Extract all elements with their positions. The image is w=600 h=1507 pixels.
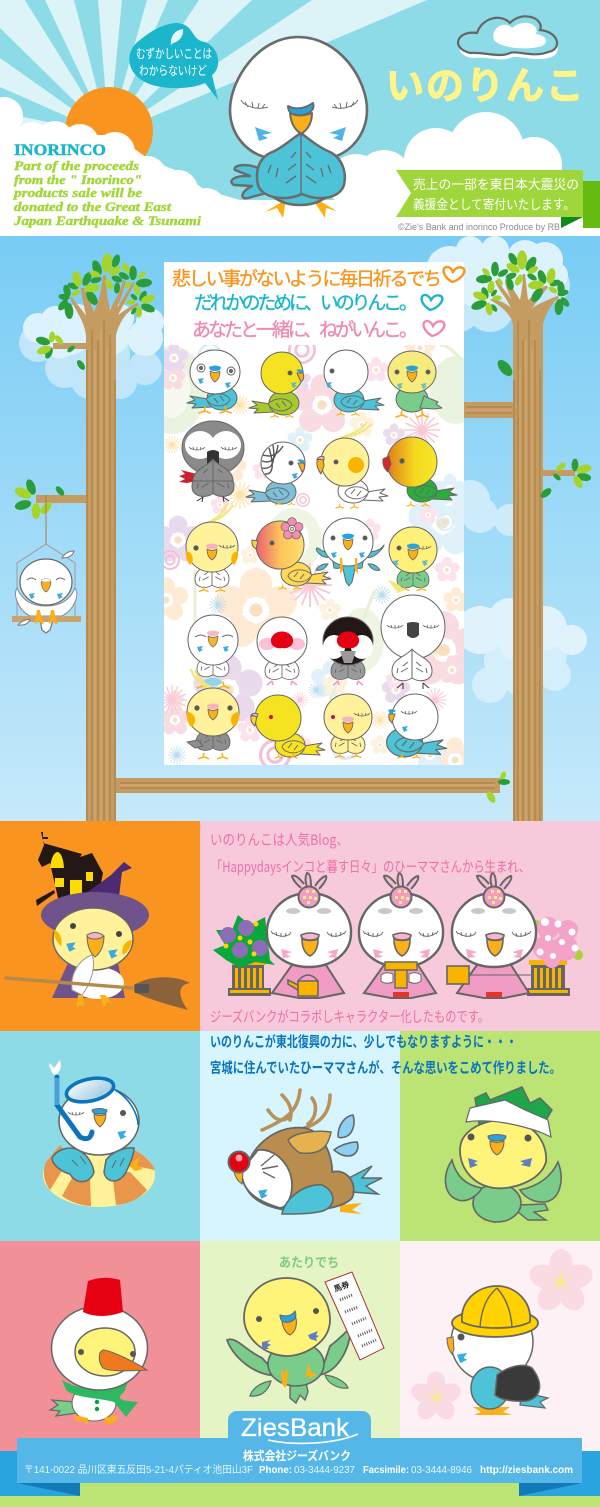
white strip below header xyxy=(0,228,600,236)
right tree xyxy=(464,250,592,821)
cloud logo top right xyxy=(458,16,558,59)
head xyxy=(59,1087,139,1155)
backpack xyxy=(495,1365,540,1401)
scarf xyxy=(62,1380,138,1417)
carrot xyxy=(99,1350,147,1371)
tail xyxy=(517,1204,548,1220)
yellow cap xyxy=(452,1286,538,1337)
bubble text: むずかしいことは xyxy=(136,43,212,62)
ear xyxy=(288,1131,331,1153)
bird: pale yellow budgie xyxy=(388,351,442,417)
intro text: ジーズバンクがコラボしキャラクター化したものです。 xyxy=(210,1006,489,1027)
bird: peach side bird with flower xyxy=(252,518,331,589)
bird grid xyxy=(179,350,457,759)
bandana xyxy=(466,1100,551,1137)
bird: big white cockatiel xyxy=(381,580,445,689)
paper: 馬券 xyxy=(332,1279,351,1295)
footer background xyxy=(0,1451,600,1507)
cheeks xyxy=(255,127,346,141)
bird: white flying bird xyxy=(316,518,384,586)
paper xyxy=(325,1272,384,1360)
logo: ZiesBank xyxy=(241,1414,350,1442)
leaves xyxy=(470,251,592,500)
tail xyxy=(520,1392,548,1408)
face xyxy=(70,923,76,929)
message lines: だれかのために、いのりんこ。 xyxy=(194,288,418,315)
haunted house xyxy=(36,832,103,906)
address line: 03-3444-9237 xyxy=(294,1465,355,1476)
bird: grey praying bird xyxy=(179,421,244,502)
address line: http://ziesbank.com xyxy=(480,1465,573,1476)
intro text: いのりんこは人気Blog、 xyxy=(210,829,349,850)
bird: white side budgie xyxy=(324,350,384,415)
main praying bird xyxy=(230,37,367,218)
English description: Part of the proceeds xyxy=(14,159,139,173)
bird: yellow side bird xyxy=(251,695,325,758)
snow head xyxy=(52,1306,148,1390)
feet xyxy=(74,1415,118,1425)
poster panel xyxy=(164,262,466,765)
left plant and stand xyxy=(213,915,275,996)
tail xyxy=(50,1400,77,1416)
bird: java sparrow black xyxy=(323,617,373,685)
bird: cockatiel yellow xyxy=(317,422,388,508)
head xyxy=(451,1302,533,1382)
plank xyxy=(12,616,81,622)
string and cage xyxy=(45,495,47,544)
bird: yellow green wings xyxy=(389,527,437,590)
bird: white budgie with round eyes xyxy=(187,350,240,413)
body xyxy=(264,155,336,205)
tail xyxy=(231,165,270,198)
leaves xyxy=(14,253,156,512)
sakura xyxy=(409,1249,596,1423)
eyes and beak xyxy=(468,1134,474,1140)
heading: INORINCO: INORINCO xyxy=(14,142,106,159)
falling feathers xyxy=(18,551,74,625)
swim ring xyxy=(43,1143,155,1207)
ribbon folds xyxy=(17,1483,582,1496)
English description: from the " Inorinco" xyxy=(14,173,142,187)
eyes xyxy=(241,100,358,108)
address line: 〒141-0022 品川区東五反田5-21-4パティオ池田山3F xyxy=(24,1463,253,1476)
feet xyxy=(474,1208,512,1224)
head xyxy=(460,1120,546,1188)
beak xyxy=(290,113,312,134)
bubble text: わからないけど xyxy=(139,60,207,79)
trunk and branches xyxy=(490,274,575,821)
cheeks xyxy=(262,1331,319,1349)
clouds in sky xyxy=(19,236,587,703)
body xyxy=(72,1385,116,1421)
header background with sun rays xyxy=(0,0,600,236)
address line: 03-3444-8946 xyxy=(411,1465,472,1476)
tail and leaves xyxy=(290,1378,308,1403)
panel: school bird xyxy=(400,1241,600,1451)
clouds in header xyxy=(0,97,600,238)
icon: feather xyxy=(171,29,183,45)
address line: Phone: xyxy=(259,1465,292,1476)
wings xyxy=(257,133,345,198)
panel: snorkel xyxy=(0,1031,200,1241)
wings xyxy=(227,1328,350,1375)
panel: headband bird xyxy=(400,1031,600,1241)
wing xyxy=(72,955,94,995)
face xyxy=(120,1110,126,1116)
cape xyxy=(52,963,125,998)
wings xyxy=(128,1157,143,1171)
doll: centre with book xyxy=(359,873,443,998)
doll: left with bucket xyxy=(267,873,351,998)
head xyxy=(20,559,72,605)
company name: 株式会社ジーズバンク xyxy=(243,1448,351,1463)
cheeks xyxy=(468,1158,532,1168)
panel: lucky bird xyxy=(200,1241,400,1451)
witch head xyxy=(53,908,133,970)
hat xyxy=(83,1278,123,1316)
ribbon text: 売上の一部を東日本大震災の xyxy=(413,177,579,192)
mask xyxy=(64,1074,116,1106)
bird: cockatiel grey wings xyxy=(187,669,239,759)
buttons xyxy=(95,1400,99,1411)
feet xyxy=(340,1203,362,1214)
message lines xyxy=(172,264,442,342)
broom bristles xyxy=(134,977,190,1010)
bird: yellow side budgie xyxy=(249,352,304,417)
speech bubble xyxy=(129,23,218,100)
broom xyxy=(6,978,132,988)
spray xyxy=(49,1060,61,1075)
address line: Facsimile: xyxy=(363,1465,409,1476)
title: いのりんこ xyxy=(386,66,584,108)
head xyxy=(244,1278,330,1356)
blue message text xyxy=(210,1031,561,1078)
panel: pink hina dolls xyxy=(200,821,600,1031)
bird: lovebird xyxy=(383,437,457,506)
belly xyxy=(72,967,124,999)
logo tab xyxy=(228,1411,371,1451)
antlers xyxy=(262,1090,330,1130)
beak xyxy=(234,1172,243,1184)
head xyxy=(230,37,367,158)
sweat drops xyxy=(334,1115,358,1156)
feet xyxy=(281,1362,317,1388)
sky panel xyxy=(0,236,600,821)
feet xyxy=(473,1407,512,1415)
panel: deer xyxy=(200,1031,400,1241)
feet xyxy=(265,200,337,218)
ribbon text: 義援金として寄付いたします。 xyxy=(413,197,575,212)
sun xyxy=(65,87,153,175)
wing xyxy=(282,1185,333,1214)
message lines: 悲しい事がないように毎日祈るでち xyxy=(172,264,442,291)
doll: right with fan xyxy=(447,873,536,998)
bird: pale yellow praying xyxy=(324,694,372,757)
green ribbon xyxy=(396,170,600,228)
English description: donated to the Great East xyxy=(14,200,172,214)
English description: products sale will be xyxy=(13,186,143,200)
copyright: ©Zie's Bank and inorinco Produce by RB xyxy=(398,222,560,232)
beak xyxy=(282,1318,296,1335)
face xyxy=(242,1150,292,1208)
English description: Japan Earthquake & Tsunami xyxy=(13,214,202,228)
left tree xyxy=(13,253,510,821)
nose xyxy=(228,1152,250,1172)
hanging swing with bird xyxy=(12,495,81,633)
feet xyxy=(35,610,58,624)
tail xyxy=(345,1166,382,1194)
bird: striped white side bird xyxy=(246,442,305,505)
hat xyxy=(41,862,149,938)
caption: あたりでち xyxy=(279,1252,339,1271)
hat xyxy=(475,1087,552,1130)
right plant and stand xyxy=(527,917,583,996)
body xyxy=(268,1342,324,1386)
tail xyxy=(40,620,53,633)
message lines: あなたと一緒に、ねがいんこ。 xyxy=(192,315,418,342)
intro text xyxy=(210,829,530,1027)
bird: java sparrow white xyxy=(257,617,307,685)
bird wings xyxy=(16,588,77,616)
tube xyxy=(57,1077,92,1139)
feet xyxy=(77,995,113,1008)
bird: white bird with teal wing xyxy=(387,694,447,758)
bird: cockatiel praying xyxy=(186,503,238,591)
wings xyxy=(445,1160,561,1202)
trunk and branches xyxy=(70,275,500,821)
floral pattern xyxy=(164,345,464,765)
body xyxy=(244,1128,354,1211)
panel: snowman xyxy=(0,1241,200,1451)
body xyxy=(473,1184,521,1222)
footer ribbon xyxy=(17,1438,582,1483)
hearts xyxy=(422,267,464,336)
panel: orange halloween xyxy=(0,821,200,1031)
bird: white praying smiling xyxy=(188,615,238,688)
body xyxy=(471,1367,509,1409)
